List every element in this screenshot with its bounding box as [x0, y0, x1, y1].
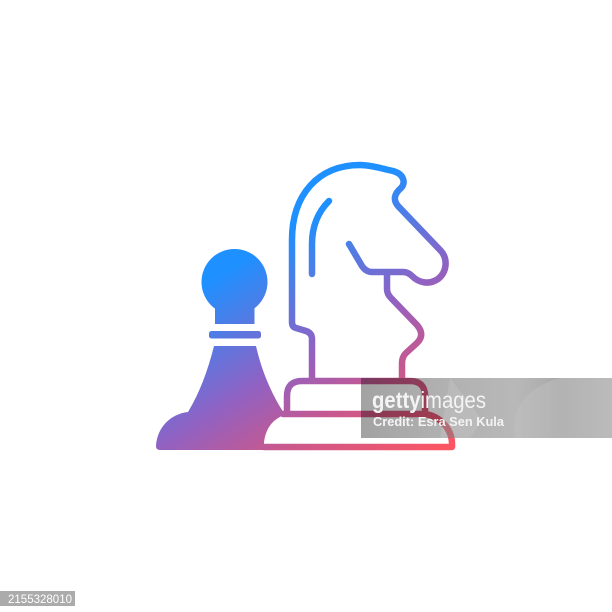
- watermark wordmark: gettyimages: [372, 387, 486, 413]
- icon: chess pawn: [156, 249, 284, 450]
- watermark credit: Credit: Esra Sen Kula: [373, 415, 505, 429]
- icon: chess knight: [264, 165, 452, 447]
- watermark: getty images banner: [361, 378, 612, 438]
- image id tag: [0, 591, 75, 606]
- image id tag: 2155328010: [8, 594, 72, 606]
